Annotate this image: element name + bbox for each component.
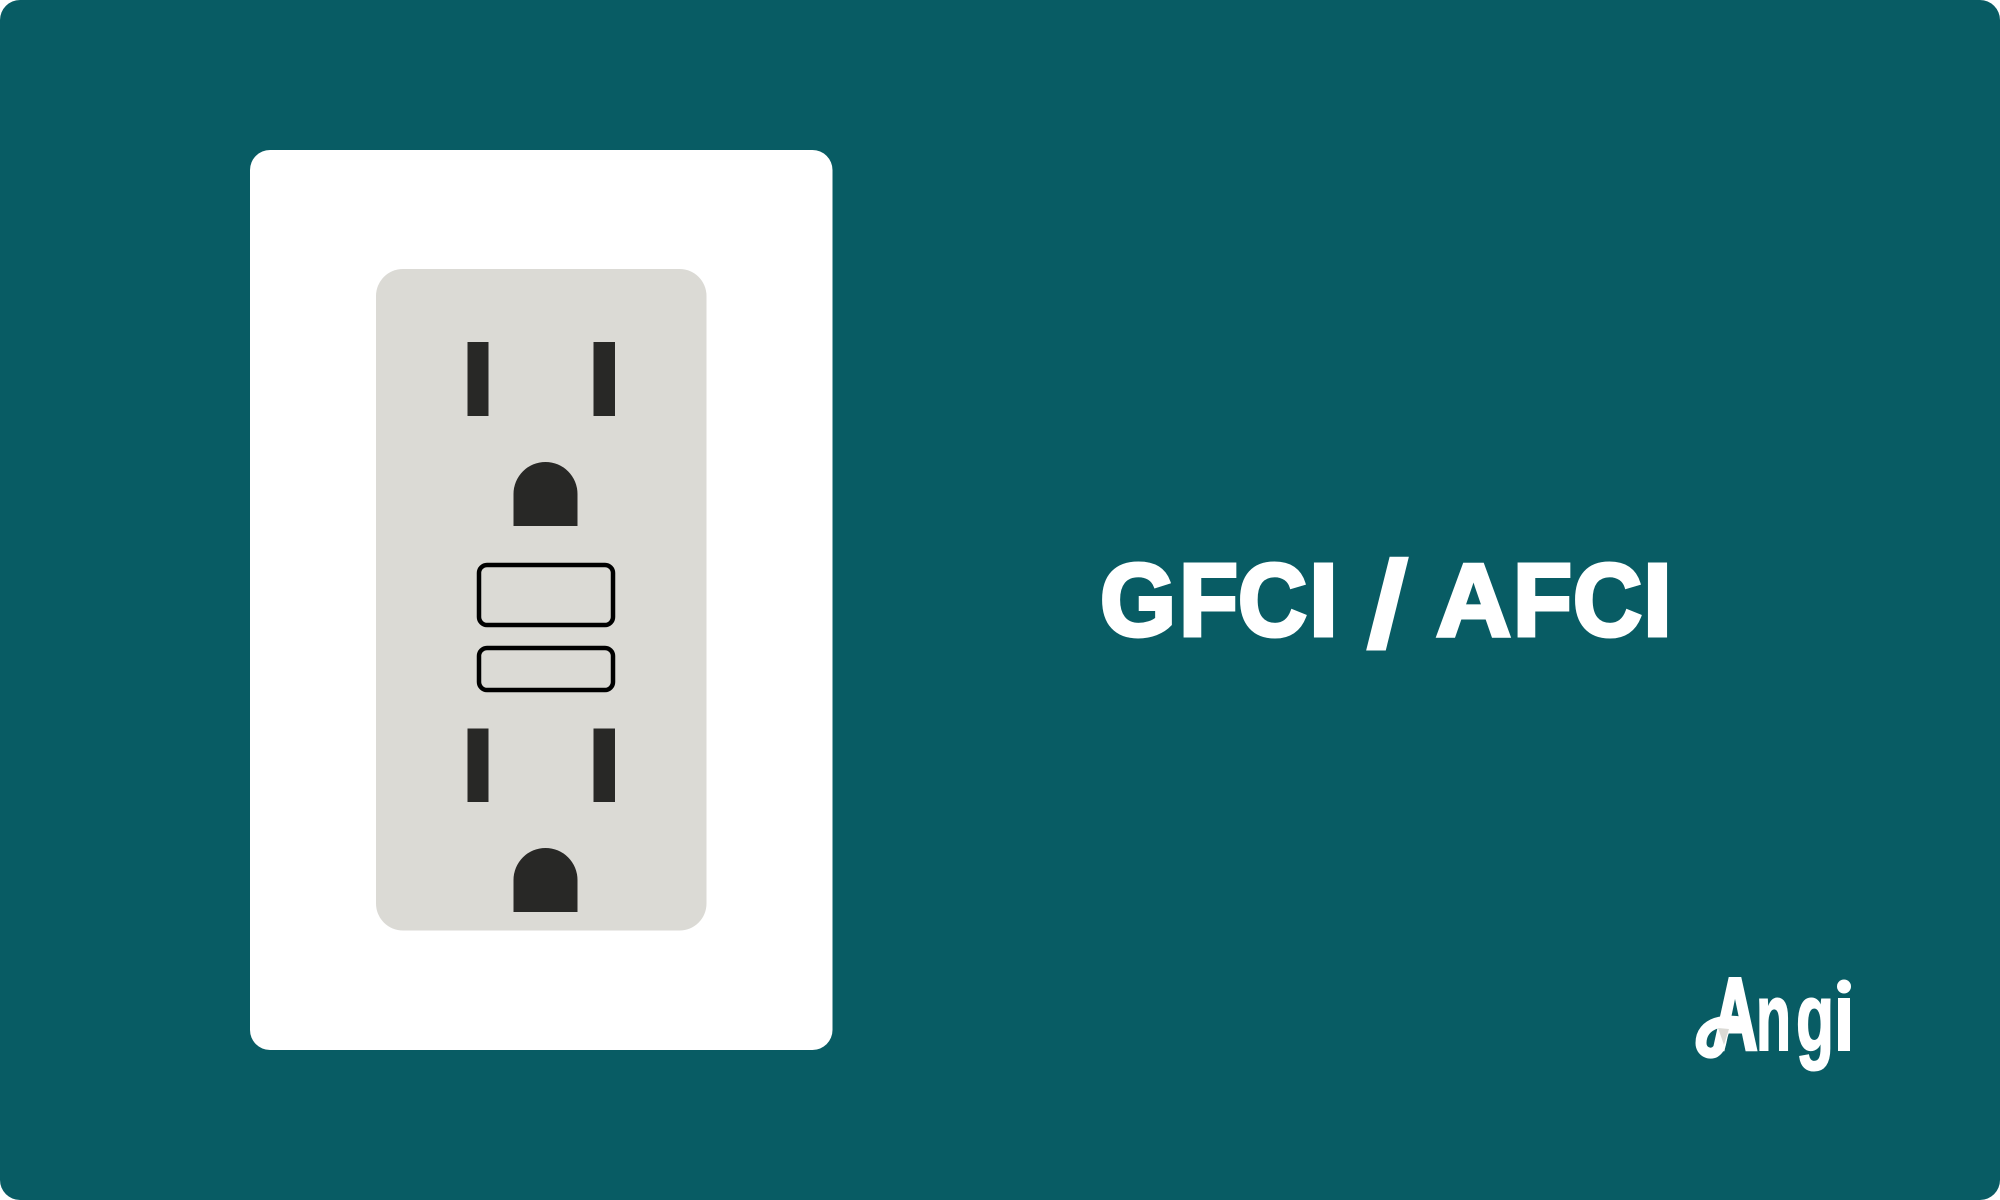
upper ground hole [514,462,578,526]
heading: GFCI / AFCI: F [1179,542,1238,658]
upper left slot [468,342,488,416]
lower left slot [468,728,488,802]
upper right slot [594,342,615,416]
heading: GFCI / AFCI: F [1513,542,1572,658]
heading: GFCI / AFCI: G [1100,542,1176,658]
test button [479,565,613,625]
heading: GFCI / AFCI: A [1436,542,1511,658]
logo wordmark: A [1713,958,1757,1070]
logo wordmark: n [1756,964,1791,1071]
heading: GFCI / AFCI: / [1364,534,1410,675]
heading: GFCI / AFCI: I [1309,542,1338,658]
logo fold highlight [1718,1028,1729,1045]
heading: GFCI / AFCI: C [1573,542,1642,658]
reset button [479,648,613,690]
logo swoosh [1701,1021,1745,1053]
heading: GFCI / AFCI: I [1643,542,1672,658]
heading: GFCI / AFCI: C [1238,542,1307,658]
outlet face [376,269,706,930]
Angi logo [1701,958,1851,1071]
logo wordmark [1713,958,1851,1071]
lower right slot [594,728,615,802]
heading: GFCI / AFCI [1100,534,1672,675]
logo wordmark: g [1796,964,1834,1071]
outlet wall plate [250,150,832,1050]
lower ground hole [514,848,578,912]
